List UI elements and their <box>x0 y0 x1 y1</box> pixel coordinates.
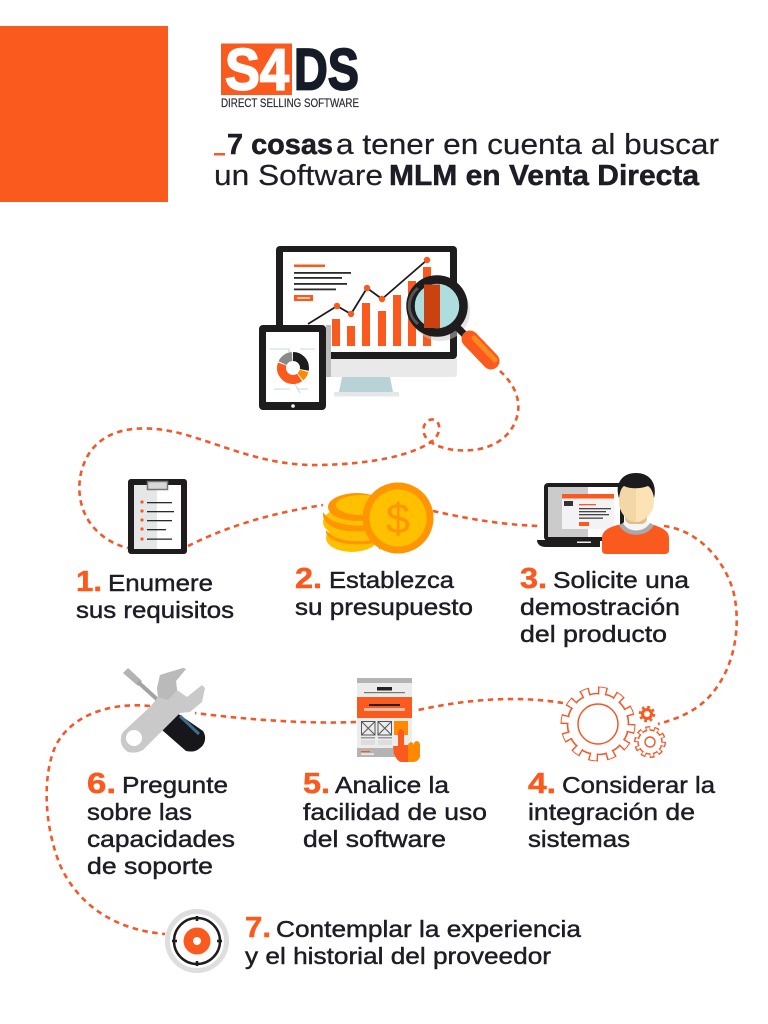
icon: laptop with person <box>537 473 669 554</box>
laptop <box>537 483 624 547</box>
icon: interface with pointing hand <box>357 678 420 762</box>
step 3 text <box>520 563 690 647</box>
pointing hand <box>393 729 420 762</box>
person <box>602 473 669 554</box>
icon: magnifying glass <box>409 280 495 361</box>
icon: tablet <box>259 325 331 410</box>
dashed connector path: interface to tools <box>195 713 356 723</box>
icon: monitor with chart and tablet <box>259 246 495 410</box>
dashed connector path: coins to laptop <box>433 511 541 526</box>
dashed connector path: tools to target <box>47 705 165 934</box>
logo: S4DS: DS <box>294 38 359 102</box>
logo: S4DS <box>221 38 359 110</box>
step 5 text: 5. <box>303 768 330 800</box>
step 2 text: Establezca <box>329 567 455 593</box>
title: MLM en Venta Directa <box>389 160 700 192</box>
step 2 text <box>295 563 473 620</box>
step 5 text: del software <box>303 826 446 852</box>
step 6 text: capacidades <box>87 826 235 852</box>
small solid gear <box>640 708 654 720</box>
title: un Software <box>214 160 383 192</box>
dashed connector path: clipboard to coins <box>188 505 323 546</box>
large gear <box>564 690 632 758</box>
wrench <box>121 668 205 753</box>
logo: S4DS: S4 <box>225 38 289 102</box>
step 6 text: 6. <box>87 768 116 800</box>
step 7 text: Contemplar la experiencia <box>276 916 582 942</box>
step 2 text: 2. <box>295 563 322 595</box>
title <box>214 129 720 192</box>
dashed connector path: gears to interface <box>414 699 563 711</box>
line chart <box>308 257 430 324</box>
step 4 text: sistemas <box>528 826 630 852</box>
donut chart <box>277 352 309 384</box>
icon: wrench and screwdriver <box>121 668 205 753</box>
step 3 text: demostración <box>520 594 680 620</box>
bar chart <box>332 267 431 346</box>
step 1 text <box>76 566 234 623</box>
screwdriver <box>123 668 205 752</box>
step 6 text: sobre las <box>87 799 192 825</box>
step 4 text: integración de <box>528 799 695 825</box>
step 1 text: sus requisitos <box>76 597 234 623</box>
icon: clipboard <box>128 479 187 554</box>
step 2 text: su presupuesto <box>295 594 473 620</box>
orange corner block <box>0 26 168 202</box>
dashed connector path: magnifier to clipboard <box>79 371 518 548</box>
icon: target <box>168 912 226 970</box>
step 5 text <box>303 768 487 852</box>
step 3 text: 3. <box>520 563 547 595</box>
icon: coins: $ <box>386 495 410 543</box>
step 1 text: 1. <box>76 566 102 598</box>
monitor <box>276 246 457 396</box>
title: 7 cosas <box>227 129 333 161</box>
step 5 text: Analice la <box>335 772 450 798</box>
step 4 text <box>528 768 716 852</box>
dashed connector path: person to gears <box>658 526 737 724</box>
step 5 text: facilidad de uso <box>303 799 487 825</box>
step 1 text: Enumere <box>108 570 213 596</box>
step 7 text: y el historial del proveedor <box>245 943 551 969</box>
step 3 text: del producto <box>520 621 667 647</box>
step 4 text: Considerar la <box>562 772 716 798</box>
icon: gears <box>564 690 664 758</box>
step 3 text: Solicite una <box>553 567 690 593</box>
step 6 text <box>87 768 235 879</box>
step 6 text: Pregunte <box>122 772 228 798</box>
step 6 text: de soporte <box>87 853 213 879</box>
step 7 text <box>245 912 582 969</box>
icon: coins <box>323 482 434 554</box>
monitor text lines <box>294 264 351 301</box>
step 7 text: 7. <box>245 912 271 944</box>
small outlined gear <box>636 728 664 756</box>
logo: S4DS: DIRECT SELLING SOFTWARE <box>221 96 359 110</box>
title: a tener en cuenta al buscar <box>336 129 720 161</box>
step 4 text: 4. <box>528 768 556 800</box>
